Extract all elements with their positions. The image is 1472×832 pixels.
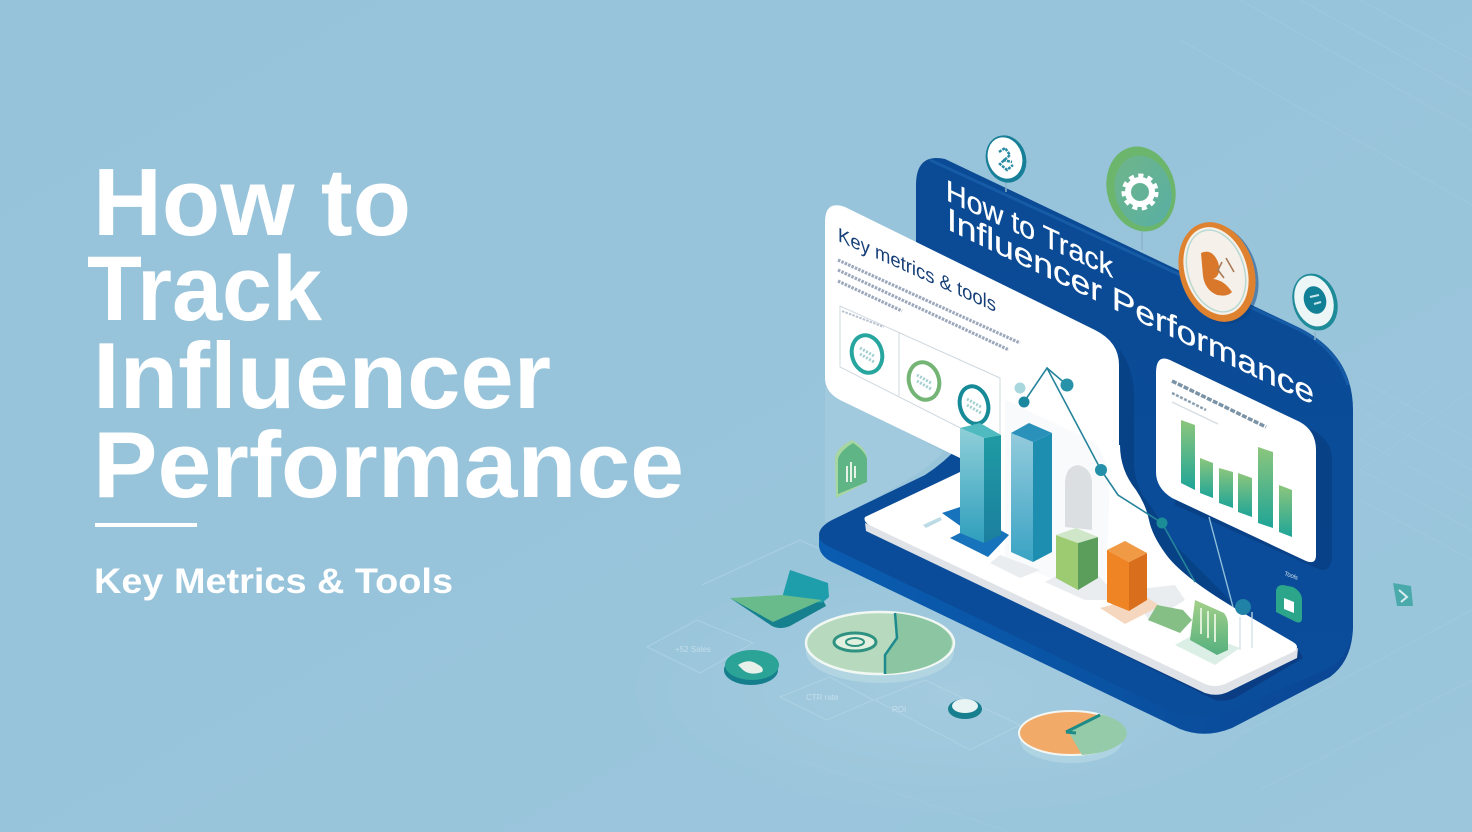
line chart — [1014, 368, 1251, 615]
platform shadow — [865, 528, 1303, 701]
label near right tag: Tools — [1283, 571, 1299, 582]
icon: connector stems — [1006, 182, 1315, 340]
floor data outlines: CTR rate — [806, 693, 839, 702]
card shadow — [1172, 360, 1332, 570]
metric cells — [840, 306, 1000, 448]
floor tile blue — [942, 507, 1009, 557]
green pad — [1148, 605, 1192, 633]
floor tiles grey — [990, 555, 1185, 622]
floor tile pale — [923, 517, 942, 528]
icon: orange badge — [1166, 212, 1271, 334]
isometric dashboard — [819, 158, 1353, 734]
title underline — [95, 523, 197, 527]
big pie chart — [806, 612, 954, 683]
platform — [864, 440, 1297, 686]
card panel — [1156, 359, 1316, 562]
platform thickness — [865, 523, 1298, 695]
line points — [1014, 382, 1026, 394]
upright white panel — [825, 205, 1119, 470]
glass floor panel — [825, 387, 943, 522]
blue back panel and base — [819, 158, 1353, 716]
title: Influencer — [93, 323, 551, 428]
icon: teal badge — [1285, 268, 1345, 336]
right white card — [1156, 359, 1332, 570]
pie reflection — [806, 621, 954, 683]
green tab chart — [1190, 600, 1228, 655]
floor tile orange — [1100, 596, 1160, 624]
icon: network badge — [980, 130, 1032, 188]
icon: far right tag — [1393, 583, 1413, 606]
folder chart — [730, 570, 829, 628]
card text lines — [1172, 381, 1266, 427]
metric ring: dark teal — [956, 383, 992, 427]
floor data outlines: ROI — [892, 705, 906, 714]
glass stand — [1240, 612, 1252, 650]
bar: green — [1056, 528, 1098, 590]
card bar chart — [1181, 420, 1292, 537]
bar: teal — [960, 423, 1001, 543]
floor tile green — [1175, 632, 1240, 665]
base front face — [819, 537, 1353, 734]
panel heading on blue: How to Track — [946, 172, 1113, 285]
icon: gear badge — [1097, 139, 1185, 239]
subtitle: Key Metrics & Tools — [94, 562, 453, 601]
ring details — [860, 348, 981, 413]
panel heading: Key metrics & tools — [838, 224, 996, 317]
bar: blue — [1011, 423, 1052, 562]
title: Track — [87, 238, 323, 340]
ghost panel backdrop — [1005, 400, 1110, 600]
floor data outlines — [647, 540, 1020, 750]
title — [87, 149, 684, 517]
teal blob badge — [724, 650, 779, 685]
floor data outlines: +52 Sales — [675, 645, 711, 654]
icon: small tag right — [1276, 585, 1302, 622]
ghost bar — [1065, 465, 1092, 530]
metric ring: teal — [848, 332, 886, 376]
title: How to — [93, 149, 411, 256]
front panel depth edge — [1110, 350, 1240, 610]
panel top highlight — [930, 160, 1348, 385]
white platform and panel — [825, 205, 1298, 695]
bar: orange — [1107, 541, 1147, 611]
title: Performance — [93, 412, 684, 517]
orange pie chart — [1019, 711, 1127, 763]
icon: green tag left — [835, 440, 867, 498]
panel heading on blue: Influencer Performance — [947, 201, 1314, 413]
metric ring: green — [905, 359, 943, 403]
coin badge — [948, 699, 982, 719]
panel text lines — [838, 260, 1020, 350]
